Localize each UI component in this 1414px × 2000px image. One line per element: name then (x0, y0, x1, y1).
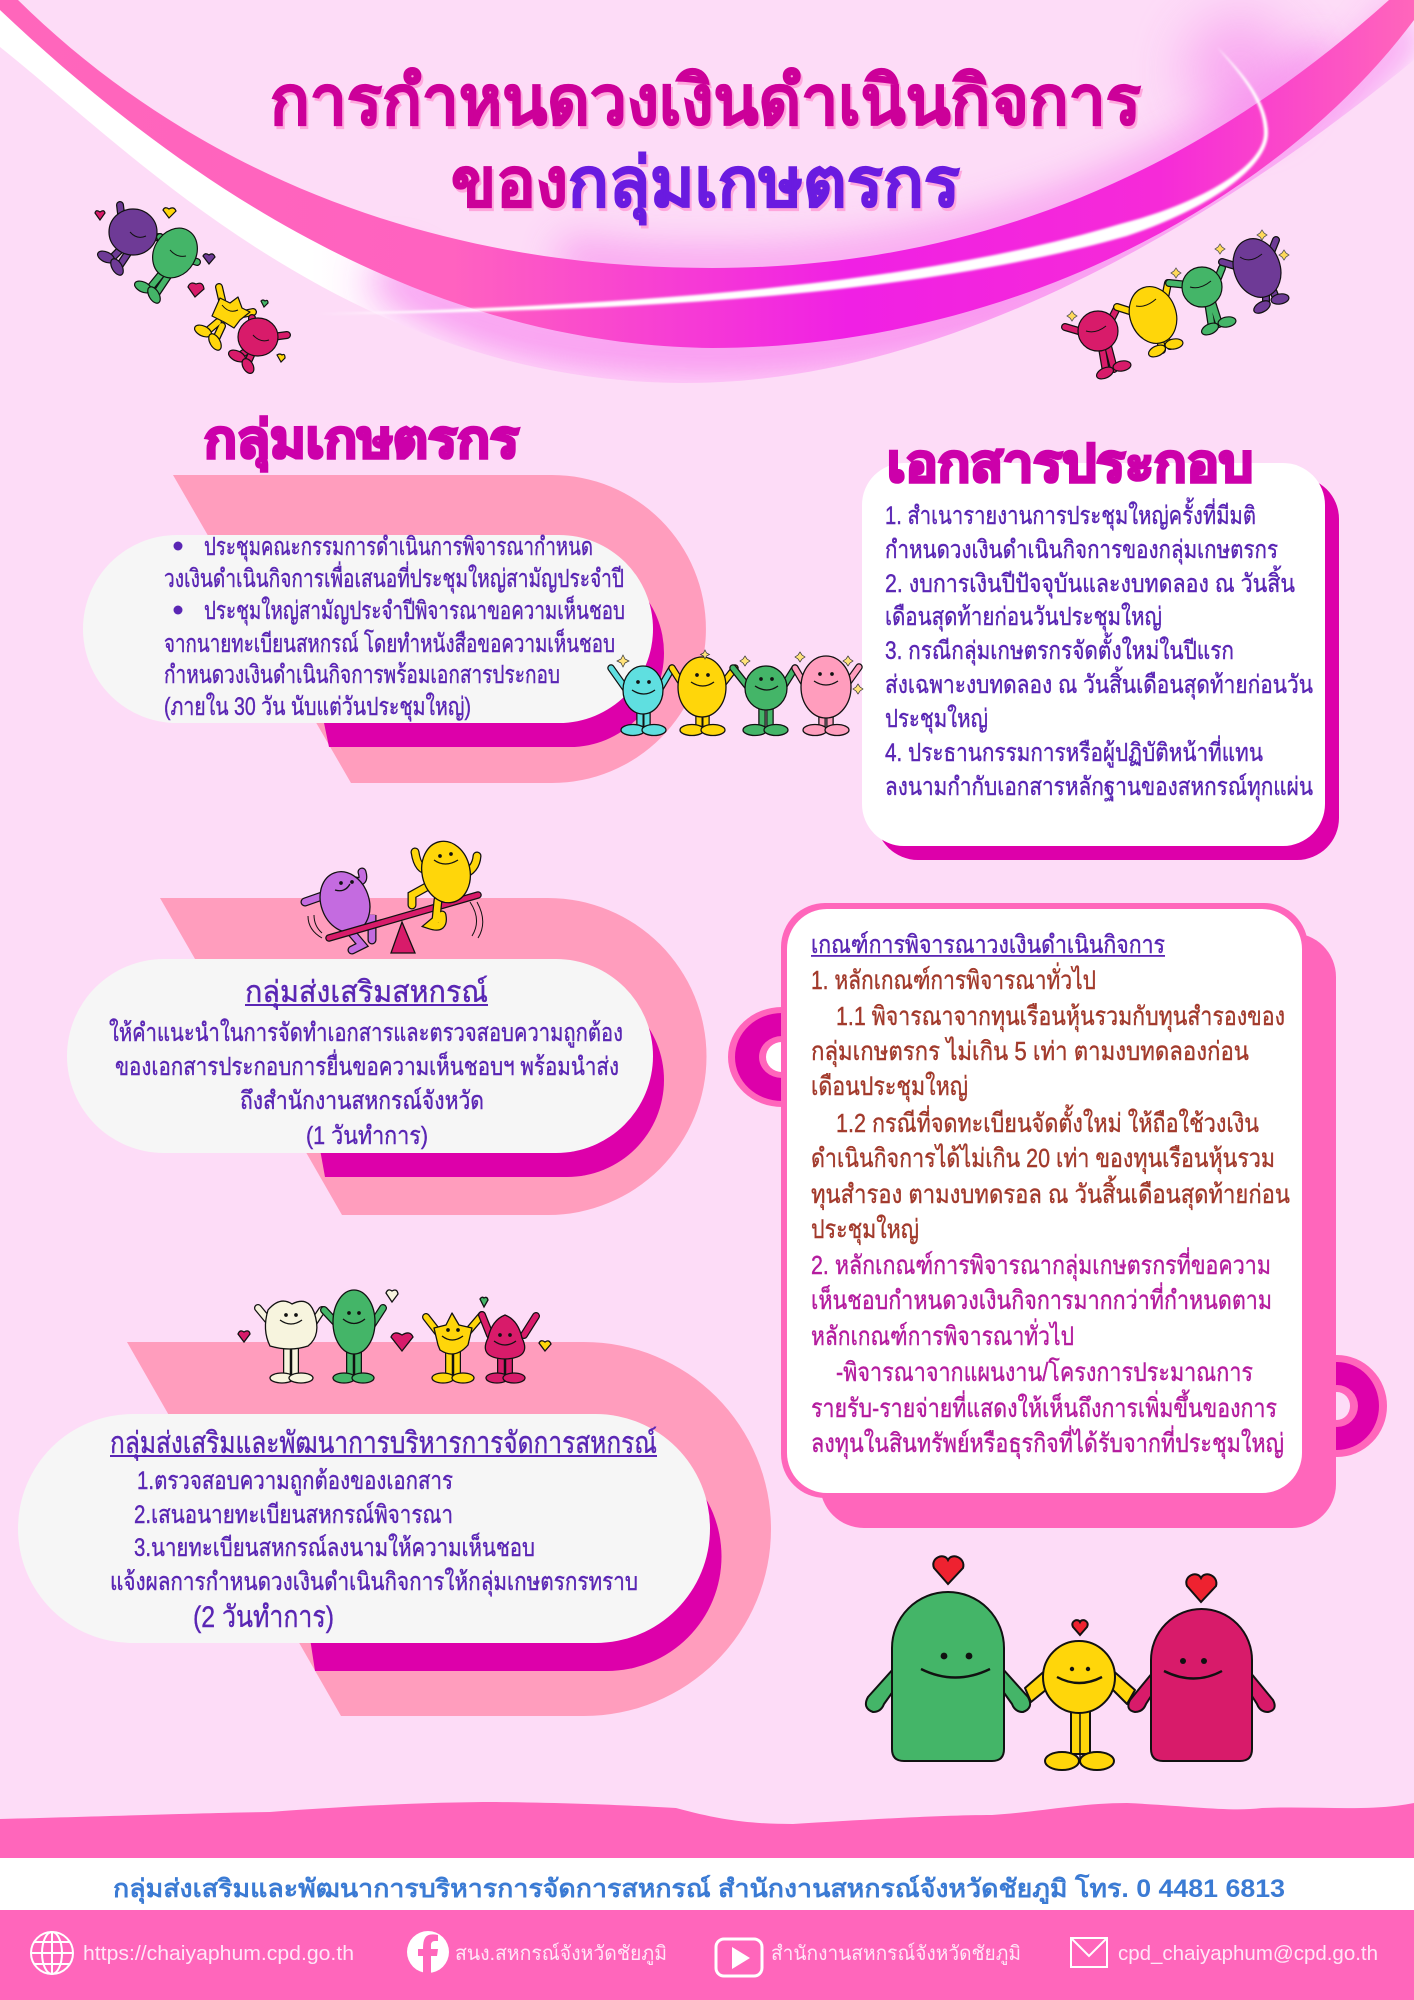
hearts (238, 1290, 551, 1351)
section heading: กลุ่มเกษตรกร: กลุ่มเกษตรกร (204, 411, 520, 472)
text block: ประชุมคณะกรรมการดำเนินการพิจารณากำหนด (204, 533, 593, 562)
email: cpd_chaiyaphum@cpd.go.th (1118, 1943, 1378, 1965)
text block: document list: 1. สำเนารายงานการประชุมใหญ่ครั้งที่มีมติ (885, 497, 1256, 531)
decorative ring left (728, 1007, 836, 1107)
panel: กลุ่มเกษตรกร (83, 475, 706, 783)
text block (109, 1018, 623, 1150)
text block: วงเงินดำเนินกิจการเพื่อเสนอที่ประชุมใหญ่สามัญประจำปี (164, 561, 624, 594)
panel: กลุ่มส่งเสริมและพัฒนาการบริหารการจัดการสหกรณ์ (18, 1342, 771, 1716)
text block: 2.เสนอนายทะเบียนสหกรณ์พิจารณา (134, 1501, 453, 1529)
illustration: seesaw characters (305, 837, 483, 953)
character: purple (96, 205, 160, 277)
character: green (733, 666, 795, 736)
character: yellow (1117, 280, 1185, 359)
contact band (0, 1858, 1414, 1910)
panel: เอกสารประกอบ (862, 435, 1339, 860)
seesaw beam colour (329, 895, 478, 938)
character: purple (305, 865, 378, 950)
website: https://chaiyaphum.cpd.go.th (83, 1943, 354, 1965)
icon: globe (31, 1932, 73, 1974)
footer bar (0, 1910, 1414, 2000)
text block: ให้คำแนะนำในการจัดทำเอกสารและตรวจสอบความถูกต้อง (109, 1018, 623, 1048)
icon: mail (1071, 1938, 1107, 1967)
text block: specific criteria: ลงทุนในสินทรัพย์หรือธุรกิจที่ได้รับจากที่ประชุมใหญ่ (811, 1425, 1284, 1459)
text block: กำหนดวงเงินดำเนินกิจการพร้อมเอกสารประกอบ (164, 661, 560, 689)
text block: general criteria: ดำเนินกิจการได้ไม่เกิน 20 เท่า ของทุนเรือนหุ้นรวม (811, 1143, 1275, 1174)
text block: 3.นายทะเบียนสหกรณ์ลงนามให้ความเห็นชอบ (134, 1532, 535, 1562)
character: crimson (227, 318, 287, 375)
seesaw beam (329, 895, 478, 938)
character: yellow star (426, 1313, 482, 1383)
illustration: characters on card three (238, 1290, 551, 1383)
character: green (1169, 267, 1237, 337)
title (270, 63, 1141, 225)
text block: general criteria: 1.1 พิจารณาจากทุนเรือนหุ้นรวมกับทุนสำรองของ (836, 1001, 1285, 1032)
character: green (133, 220, 206, 305)
illustration: four characters holding hands (611, 650, 863, 736)
sparkles (617, 650, 863, 694)
hearts (95, 208, 285, 362)
character: pink (795, 656, 859, 736)
character: purple (1222, 232, 1290, 316)
text block: (ภายใน 30 วัน นับแต่วันประชุมใหญ่) (164, 692, 471, 722)
text block: ถึงสำนักงานสหกรณ์จังหวัด (240, 1087, 484, 1115)
heading: เกณฑ์การพิจารณาวงเงินดำเนินกิจการ (811, 931, 1165, 959)
icon: facebook (407, 1931, 449, 1973)
text block: document list: 4. ประธานกรรมการหรือผู้ปฏิบัติหน้าที่แทน (885, 735, 1263, 768)
text block: specific criteria: 2. หลักเกณฑ์การพิจารณากลุ่มเกษตรกรที่ขอความ (811, 1247, 1271, 1281)
text block: general criteria: ทุนสำรอง ตามงบทดรอล ณ วันสิ้นเดือนสุดท้ายก่อน (811, 1175, 1290, 1210)
title: การกำหนดวงเงินดำเนินกิจการ (270, 63, 1141, 139)
character: yellow small (1025, 1641, 1135, 1770)
text block: ประชุมใหญ่สามัญประจำปีพิจารณาขอความเห็นชอบ (204, 595, 625, 626)
text block: document list: ส่งเฉพาะงบทดลอง ณ วันสิ้นเดือนสุดท้ายก่อนวัน (885, 666, 1313, 700)
footer wave (0, 1802, 1414, 1858)
illustration: characters top left (95, 205, 287, 375)
text block: document list: 3. กรณีกลุ่มเกษตรกรจัดตั้งใหม่ในปีแรก (885, 632, 1234, 666)
character: green (324, 1290, 383, 1383)
text block (164, 533, 625, 722)
text block (110, 1467, 638, 1634)
text block: แจ้งผลการกำหนดวงเงินดำเนินกิจการให้กลุ่มเกษตรกรทราบ (110, 1567, 638, 1597)
title: กลุ่มเกษตรกร (568, 145, 960, 225)
character: cream (258, 1301, 322, 1383)
heading: กลุ่มส่งเสริมสหกรณ์ (245, 975, 488, 1011)
text block: specific criteria: รายรับ-รายจ่ายที่แสดงให้เห็นถึงการเพิ่มขึ้นของการ (811, 1389, 1277, 1423)
seesaw base (391, 922, 415, 953)
panel: กลุ่มส่งเสริมสหกรณ์ (67, 898, 707, 1215)
text block: จากนายทะเบียนสหกรณ์ โดยทำหนังสือขอความเห็นชอบ (164, 628, 615, 658)
text block: general criteria: 1. หลักเกณฑ์การพิจารณาทั่วไป (811, 962, 1096, 995)
text block: document list: เดือนสุดท้ายก่อนวันประชุมใหญ่ (885, 602, 1162, 632)
heart: yellow character (1072, 1620, 1088, 1635)
text block: (2 วันทำการ) (193, 1601, 334, 1634)
character: green big (866, 1592, 1030, 1761)
character: crimson big (1128, 1609, 1275, 1761)
text block: document list: กำหนดวงเงินดำเนินกิจการของกลุ่มเกษตรกร (885, 536, 1278, 565)
text block: 1.ตรวจสอบความถูกต้องของเอกสาร (137, 1467, 453, 1496)
text block: general criteria: กลุ่มเกษตรกร ไม่เกิน 5 เท่า ตามงบทดลองก่อน (811, 1036, 1249, 1067)
character: yellow (672, 657, 735, 736)
text block: document list: 2. งบการเงินปีปัจจุบันและงบทดลอง ณ วันสิ้น (885, 565, 1295, 599)
title: ของ (451, 145, 568, 221)
text block: ของเอกสารประกอบการยื่นขอความเห็นชอบฯ พร้อมนำส่ง (115, 1049, 619, 1081)
character: crimson (1065, 308, 1132, 381)
text block: general criteria: 1.2 กรณีที่จดทะเบียนจัดตั้งใหม่ ให้ถือใช้วงเงิน (836, 1104, 1259, 1138)
decorative ring right (1287, 1355, 1387, 1457)
text block: general criteria: ประชุมใหญ่ (811, 1214, 919, 1245)
icon: youtube (716, 1939, 762, 1976)
contact band: กลุ่มส่งเสริมและพัฒนาการบริหารการจัดการสหกรณ์ สำนักงานสหกรณ์จังหวัดชัยภูมิ โทร. 0 4481 6813 (113, 1873, 1285, 1905)
heading: เอกสารประกอบ: เอกสารประกอบ (887, 435, 1253, 492)
panel: เกณฑ์การพิจารณาวงเงินดำเนินกิจการ (728, 903, 1387, 1528)
heading: กลุ่มส่งเสริมและพัฒนาการบริหารการจัดการสหกรณ์ (110, 1426, 657, 1462)
text block: document list (885, 497, 1313, 802)
text block: specific criteria: หลักเกณฑ์การพิจารณาทั่วไป (811, 1318, 1074, 1351)
heart: crimson character (1186, 1574, 1216, 1602)
illustration: characters top right (1065, 230, 1290, 381)
motion lines (308, 902, 483, 938)
text block: document list: ประชุมใหญ่ (885, 704, 988, 734)
header swoosh (0, 0, 1414, 383)
sparkles (1067, 230, 1289, 321)
text block: general criteria: เดือนประชุมใหญ่ (811, 1071, 968, 1102)
text block: specific criteria: -พิจารณาจากแผนงาน/โครงการประมาณการ (836, 1357, 1253, 1387)
text block: specific criteria (811, 1247, 1284, 1459)
character: yellow (412, 837, 477, 926)
text block: (1 วันทำการ) (306, 1122, 428, 1150)
illustration: big family characters (866, 1556, 1275, 1770)
youtube channel: สำนักงานสหกรณ์จังหวัดชัยภูมิ (771, 1942, 1021, 1966)
character: yellow star (193, 287, 253, 352)
character: cyan (611, 666, 672, 736)
text block: general criteria (811, 962, 1290, 1245)
text block: document list: ลงนามกำกับเอกสารหลักฐานของสหกรณ์ทุกแผ่น (885, 773, 1313, 802)
facebook page: สนง.สหกรณ์จังหวัดชัยภูมิ (455, 1942, 667, 1966)
character: crimson (482, 1315, 536, 1383)
heart: green character (933, 1556, 963, 1584)
text block: specific criteria: เห็นชอบกำหนดวงเงินกิจการมากกว่าที่กำหนดตาม (811, 1282, 1272, 1315)
